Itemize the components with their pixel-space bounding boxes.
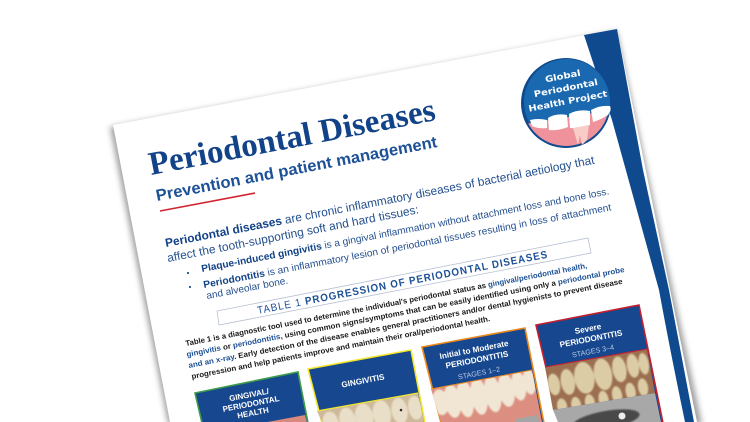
card heading: HEALTH [237, 406, 270, 420]
table description paragraph: and an x-ray. Early detection of the disease enables general practitioners and/or dental hygienists to prevent disease [188, 277, 624, 370]
subtitle: Prevention and patient management [154, 133, 439, 205]
badge text: Periodontal [533, 78, 599, 100]
red rule [160, 193, 255, 211]
x-ray corner [515, 415, 539, 422]
card heading: PERIODONTITIS [559, 328, 624, 349]
card heading: Severe [574, 322, 602, 336]
card: severe periodontitis [536, 305, 666, 422]
table description paragraph: progression and help patients improve and maintain their oral/periodontal health. [191, 314, 491, 381]
card heading: GINGIVITIS [341, 372, 386, 390]
bullet dots [187, 272, 191, 288]
tooth root [573, 125, 589, 145]
table description paragraph: gingivitis or periodontitis, using common signs/symptoms that can be easily identified using only a periodontal probe [186, 265, 626, 359]
photo: severe periodontitis teeth [545, 350, 655, 410]
card heading: STAGES 3–4 [571, 343, 615, 359]
table heading box: TABLE 1 PROGRESSION OF PERIODONTAL DISEASES [256, 249, 549, 317]
page shadow [110, 31, 702, 422]
card heading: PERIODONTITIS [445, 349, 510, 370]
bullet list: Periodontitis is an inflammatory lesion of periodontal tissues resulting in loss of attachment [203, 202, 612, 291]
card heading [439, 339, 510, 381]
table heading box [217, 238, 591, 325]
photo: moderate periodontitis teeth [431, 370, 542, 422]
card heading [222, 387, 280, 420]
badge: Global Periodontal Health Project [521, 58, 611, 148]
badge text: Global [544, 69, 582, 85]
title: Periodontal Diseases [146, 92, 438, 183]
table description paragraph: Table 1 is a diagnostic tool used to determine the individual's periodontal status as gingival/periodontal health, [185, 261, 588, 348]
card: initial to moderate periodontitis [422, 328, 550, 422]
card heading: GINGIVAL/ [228, 387, 270, 403]
x-ray image [553, 393, 661, 422]
bullet list: and alveolar bone. [206, 276, 289, 302]
teeth [530, 106, 611, 130]
card: gingival/periodontal health [195, 372, 315, 422]
card: gingivitis [308, 350, 430, 422]
card heading [559, 322, 624, 359]
infographic scene [107, 28, 705, 422]
badge text: Health Project [528, 89, 608, 115]
card heading: PERIODONTAL [222, 394, 280, 414]
card heading: Initial to Moderate [439, 339, 510, 361]
photo: gingivitis teeth [317, 393, 424, 422]
gum [528, 113, 608, 146]
photo: healthy teeth [268, 415, 307, 422]
blue side stripe [584, 29, 694, 422]
document page [113, 29, 697, 422]
badge text [528, 69, 608, 115]
bullet list: Plaque-induced gingivitis is a gingival inflammation without attachment loss and bone loss. [201, 186, 610, 275]
intro paragraph: affect the tooth-supporting soft and hard tissues: [166, 202, 420, 265]
intro paragraph: Periodontal diseases are chronic inflammatory diseases of bacterial aetiology that [164, 153, 596, 250]
card heading: STAGES 1–2 [457, 365, 501, 381]
